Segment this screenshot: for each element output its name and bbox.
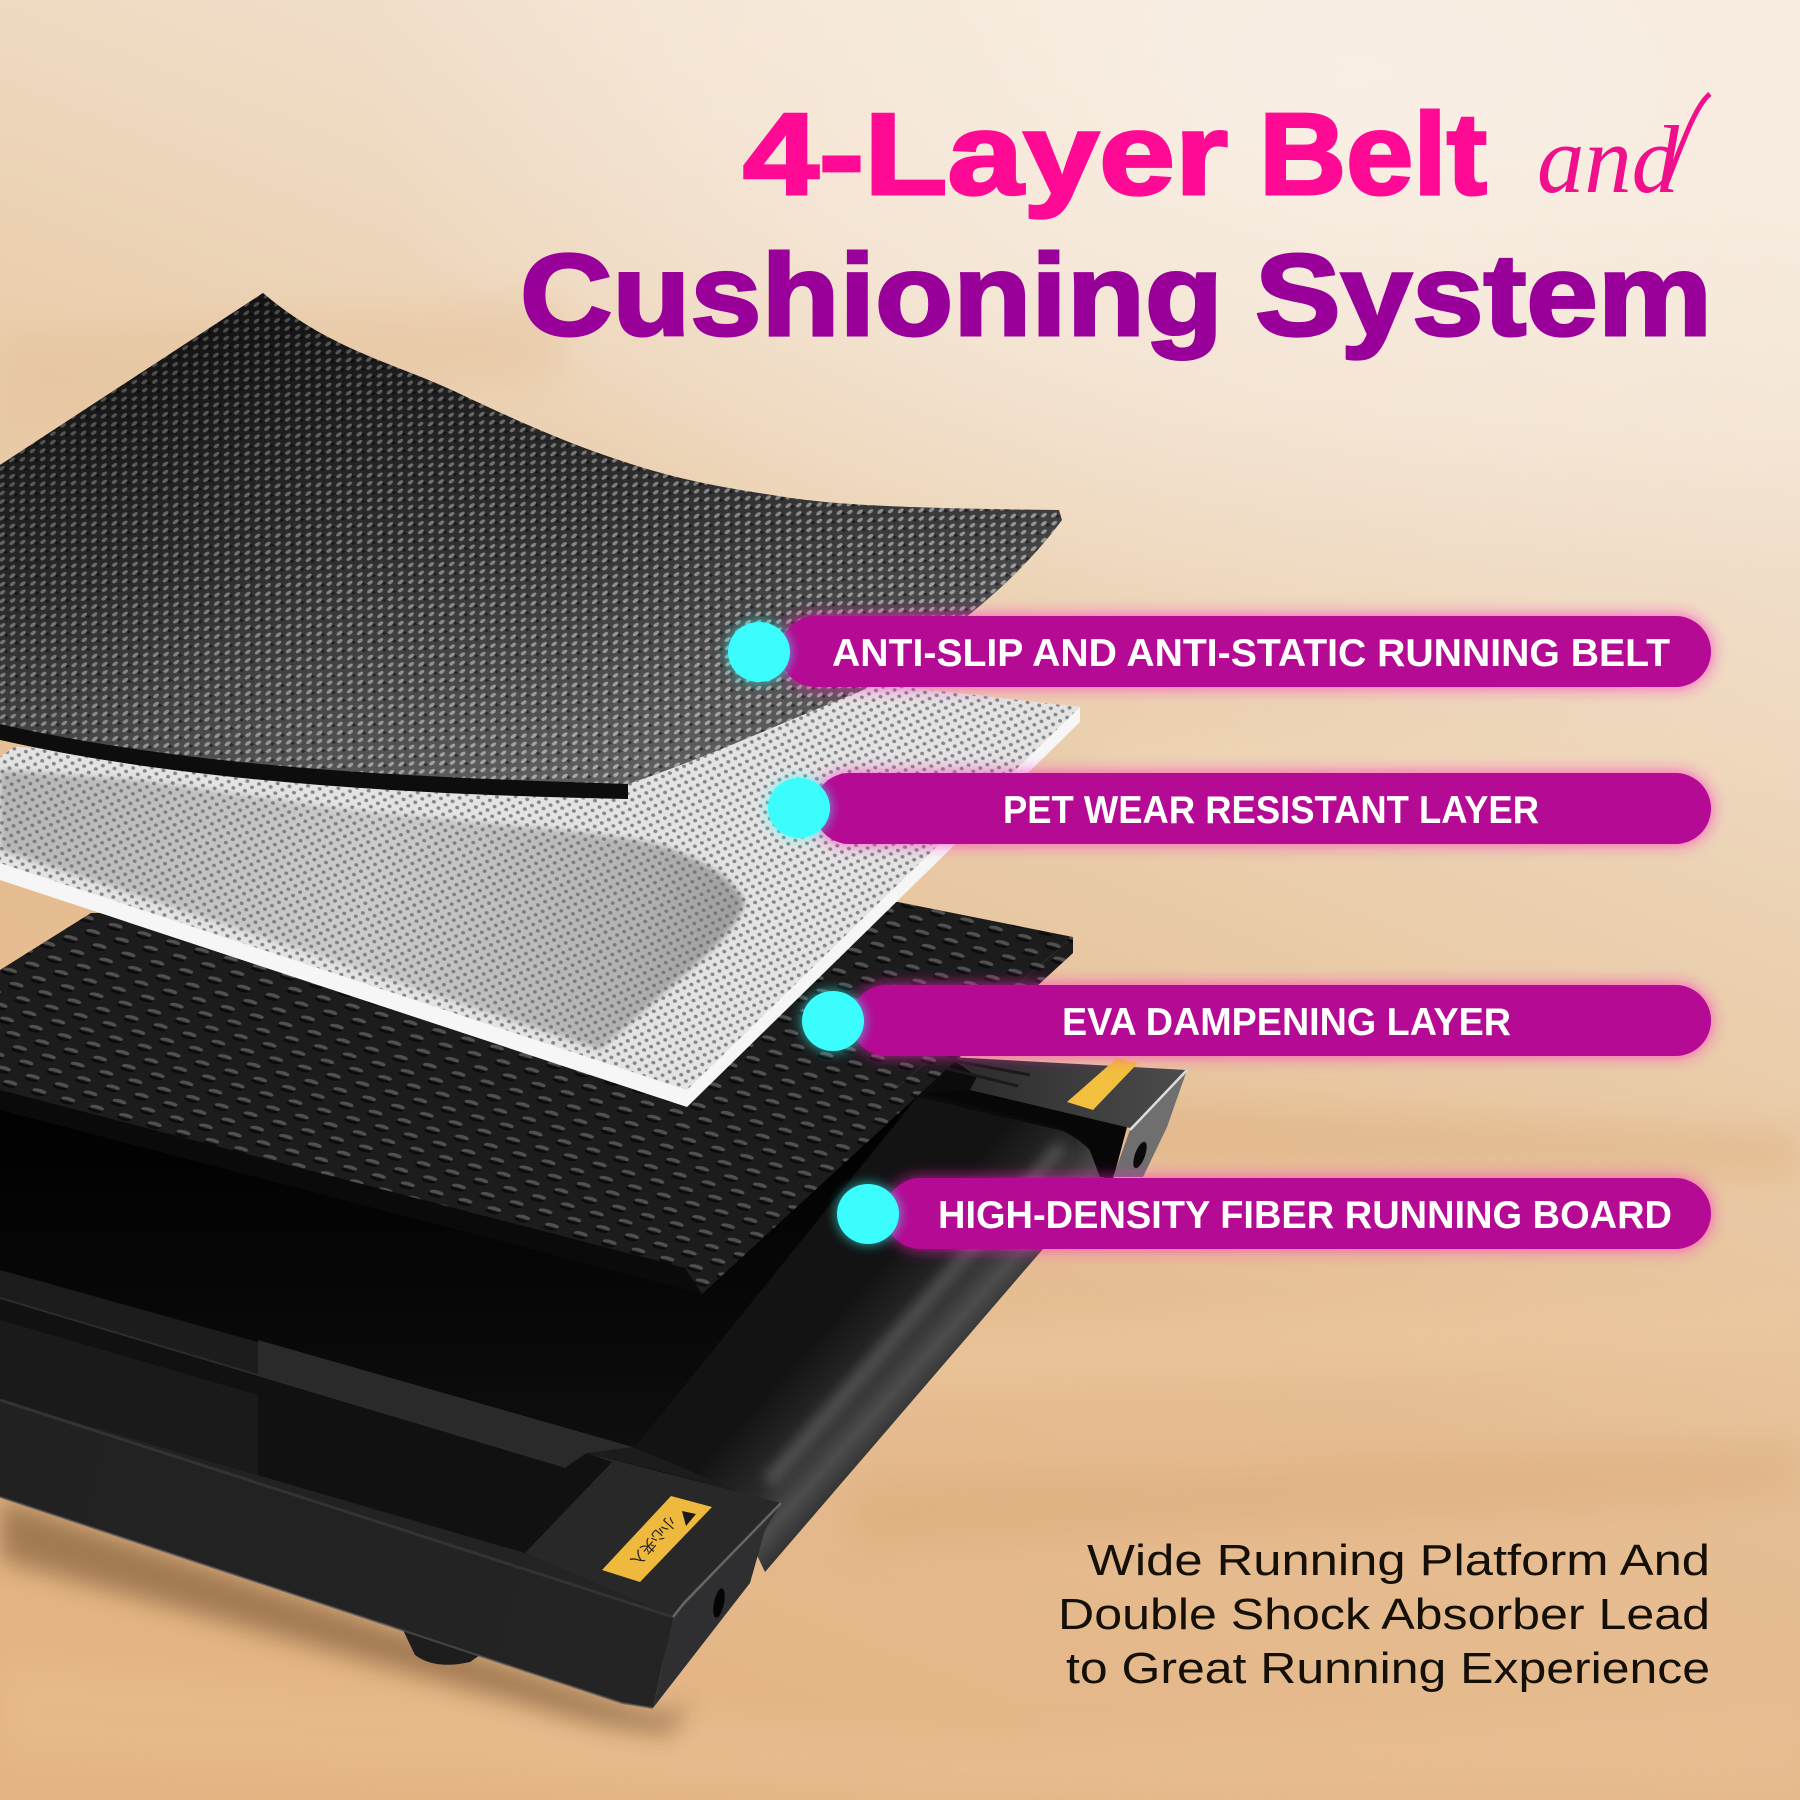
caption text	[1058, 1536, 1710, 1693]
label: fiber board: HIGH-DENSITY FIBER RUNNING BOARD	[938, 1194, 1672, 1237]
label: EVA layer: EVA DAMPENING LAYER	[1062, 1001, 1511, 1044]
title line 1: 4-Layer	[743, 89, 1228, 219]
title	[520, 89, 1712, 360]
far end cap	[920, 1057, 1187, 1177]
title line 2: Cushioning	[520, 230, 1223, 360]
running deck	[0, 1090, 918, 1447]
far side roller	[635, 1097, 1104, 1572]
dark under-body	[0, 1057, 1127, 1708]
near side rail recess	[0, 1298, 612, 1553]
near rail side	[0, 1400, 673, 1708]
warning sticker: 小心夹入	[627, 1512, 679, 1569]
title line 2: System	[1255, 230, 1712, 360]
title line 1: Belt	[1259, 89, 1487, 219]
layer: EVA dampening	[0, 902, 1073, 1294]
title line 1	[743, 89, 1487, 219]
caption text: Wide Running Platform And	[1087, 1536, 1710, 1585]
title line 2	[520, 230, 1712, 360]
script word and: and	[1537, 106, 1680, 213]
label: PET layer	[768, 773, 1711, 844]
caption text: to Great Running Experience	[1066, 1644, 1710, 1693]
floor shadow	[0, 1497, 690, 1735]
treadmill base	[0, 1057, 1187, 1735]
layer: PET wear resistant	[0, 682, 1080, 1107]
rubber foot	[403, 1630, 480, 1665]
label: running belt	[728, 616, 1711, 687]
inner shadow on layer	[0, 770, 745, 1050]
near end cap face	[653, 1503, 781, 1708]
near end cap top	[525, 1453, 781, 1617]
near side rail upper band	[0, 1270, 735, 1490]
label: running belt: ANTI-SLIP AND ANTI-STATIC RUNNING BELT	[832, 632, 1670, 675]
layer: anti-slip running belt	[0, 293, 1062, 799]
warning sticker	[602, 1496, 712, 1582]
label: PET layer: PET WEAR RESISTANT LAYER	[1003, 789, 1539, 832]
label: fiber board	[837, 1178, 1711, 1249]
caption text: Double Shock Absorber Lead	[1058, 1590, 1710, 1639]
label: EVA layer	[802, 985, 1711, 1056]
